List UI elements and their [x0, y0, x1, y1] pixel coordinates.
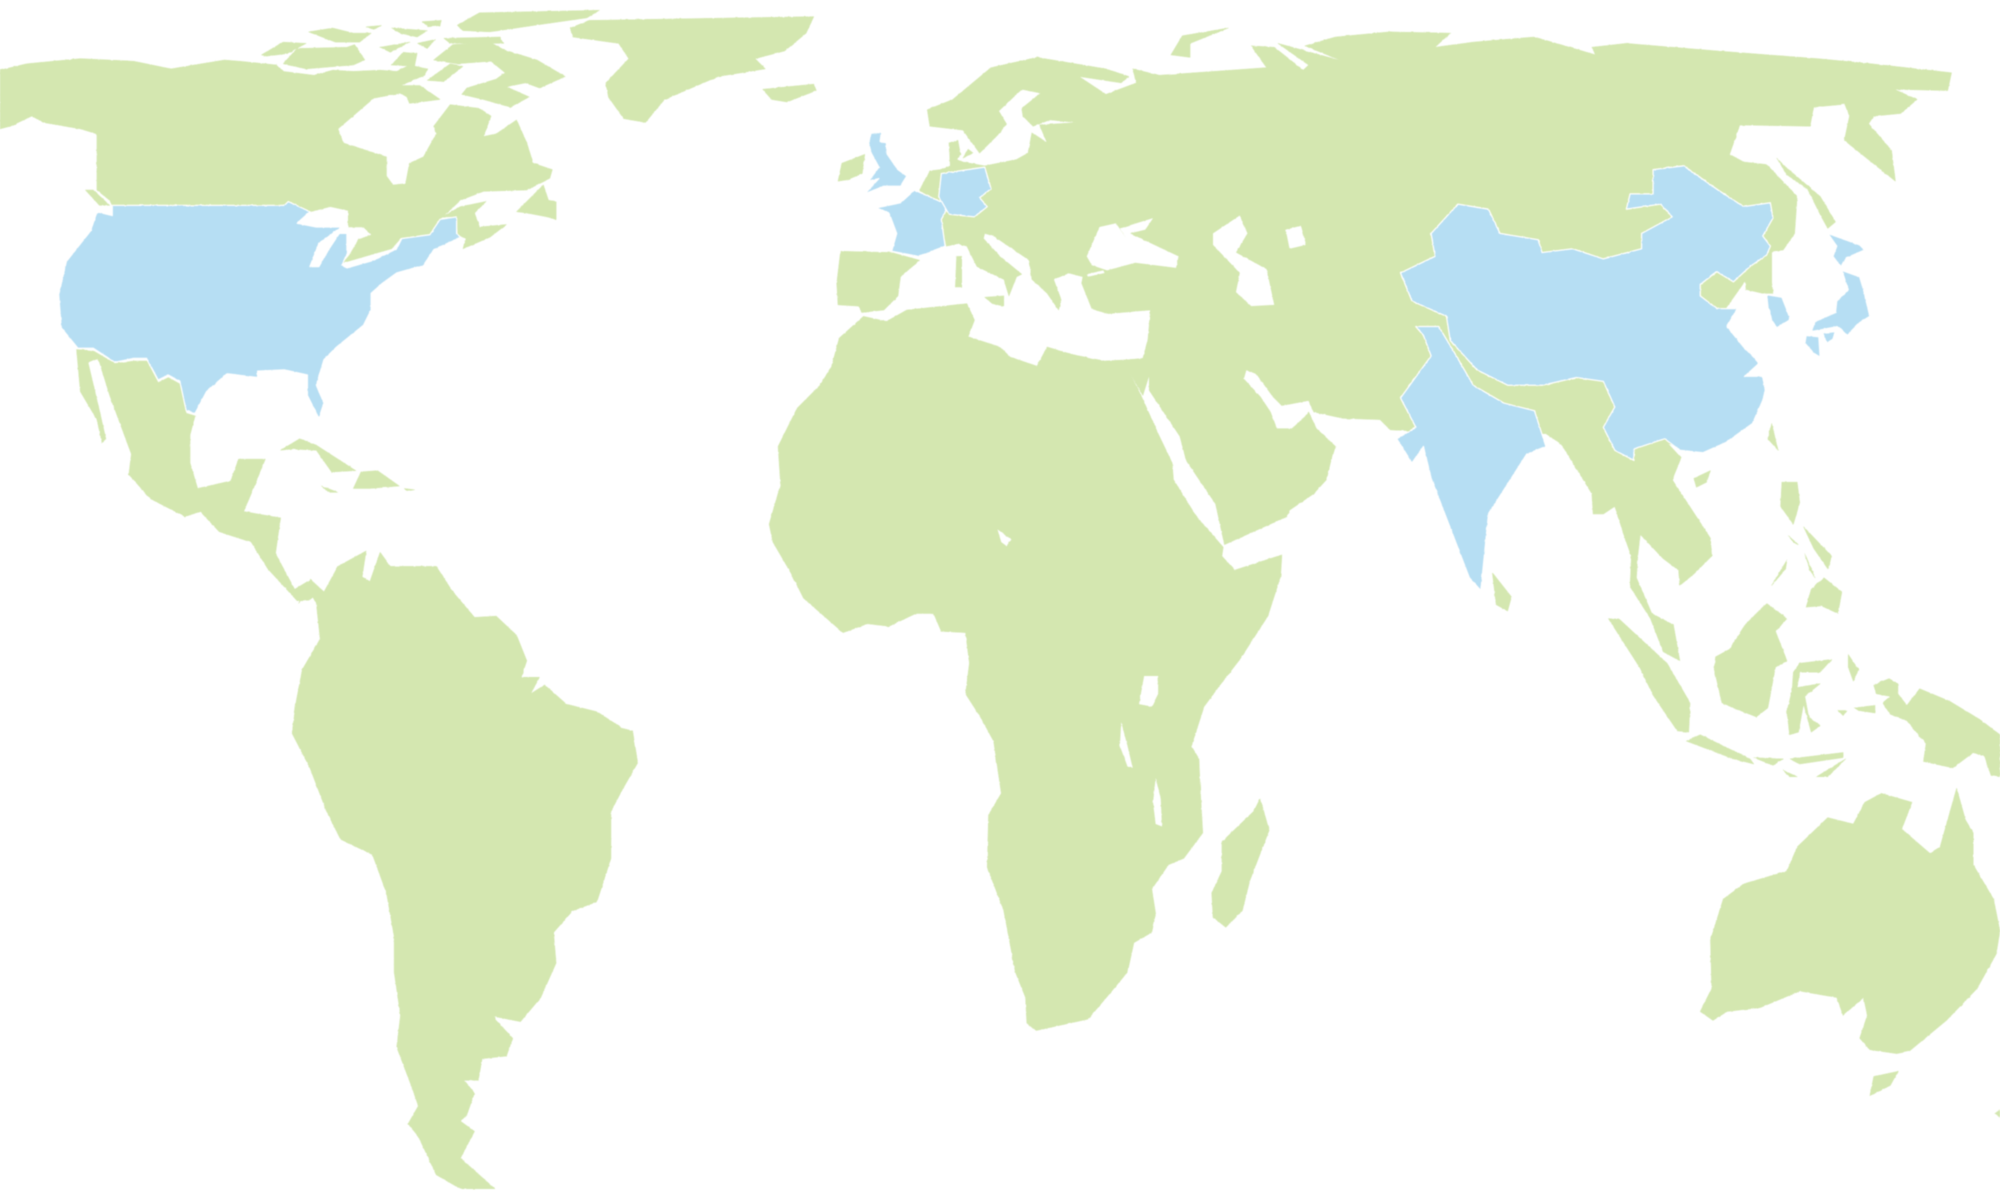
islands: Maritime Southeast Asia [1608, 482, 1875, 777]
landmass: South America [292, 551, 638, 1189]
island: New Guinea [1874, 679, 2000, 777]
country: United States [59, 202, 460, 418]
country: India [1397, 327, 1546, 591]
landmass: Africa [769, 304, 1282, 1031]
country: United Kingdom [865, 133, 907, 194]
landmass: Greenland and Iceland [570, 17, 816, 122]
country: Japan [1805, 233, 1870, 357]
country: Germany [939, 167, 991, 217]
country: France [876, 190, 949, 256]
landmass: North America [0, 10, 599, 601]
landmass: Australia [1700, 788, 2000, 1117]
country: China [1401, 166, 1773, 460]
landmass: Eurasia [837, 28, 1952, 661]
country: South Korea [1767, 295, 1790, 328]
islands: Asia [1492, 423, 1778, 611]
